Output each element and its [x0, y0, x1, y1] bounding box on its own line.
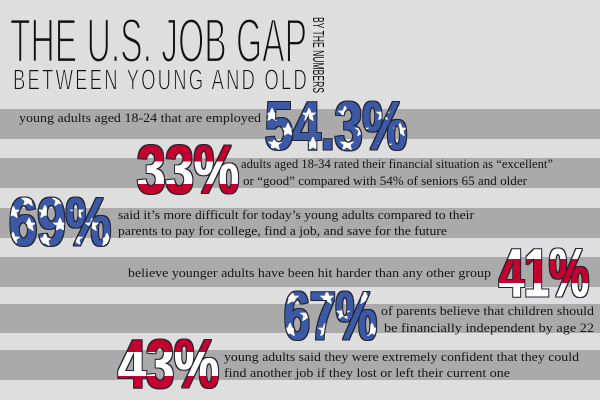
stat 5 text: of parents believe that children should [381, 303, 595, 318]
stat 4 text: believe younger adults have been hit harder than any other group [128, 265, 491, 280]
stat 3 text: said it’s more difficult for today’s young adults compared to their [118, 207, 475, 222]
stat 2: 33% [137, 131, 553, 208]
stat 1 text: young adults aged 18-24 that are employed [19, 110, 262, 125]
byline: BY THE NUMBERS [309, 17, 326, 93]
stat 3: 69% [9, 184, 475, 260]
subtitle: BETWEEN YOUNG AND OLD [13, 64, 307, 97]
stat 2 text: or “good” compared with 54% of seniors 65 and older [243, 173, 528, 188]
stat 2 text: adults aged 18-34 rated their financial situation as “excellent” [241, 156, 553, 171]
stat 5: 67%: 67% [284, 278, 377, 354]
stat 2: 33%: 33% [137, 131, 239, 208]
stat 6 text: young adults said they were extremely confident that they could [224, 349, 580, 364]
title: THE U.S. JOB GAP [10, 7, 307, 76]
stat 6 text [224, 349, 580, 380]
stat 6 text: find another job if they lost or left their current one [224, 365, 510, 380]
stat 4: 41% [128, 234, 589, 312]
stripe bands [0, 109, 600, 380]
stat 5 text: be financially independent by age 22 [384, 320, 594, 335]
stat 6: 43% [118, 326, 580, 400]
stat 3 text: parents to pay for college, find a job, and save for the future [118, 223, 447, 238]
stat 3 text [118, 207, 475, 238]
stat 3: 69%: 69% [9, 184, 111, 260]
stat 5: 67% [284, 278, 595, 354]
title [10, 7, 307, 97]
stat 5 text [381, 303, 595, 335]
stat 1: 54.3% [19, 88, 407, 164]
stat 2 text [241, 156, 553, 188]
stat 1: 54.3%: 54.3% [265, 88, 407, 164]
